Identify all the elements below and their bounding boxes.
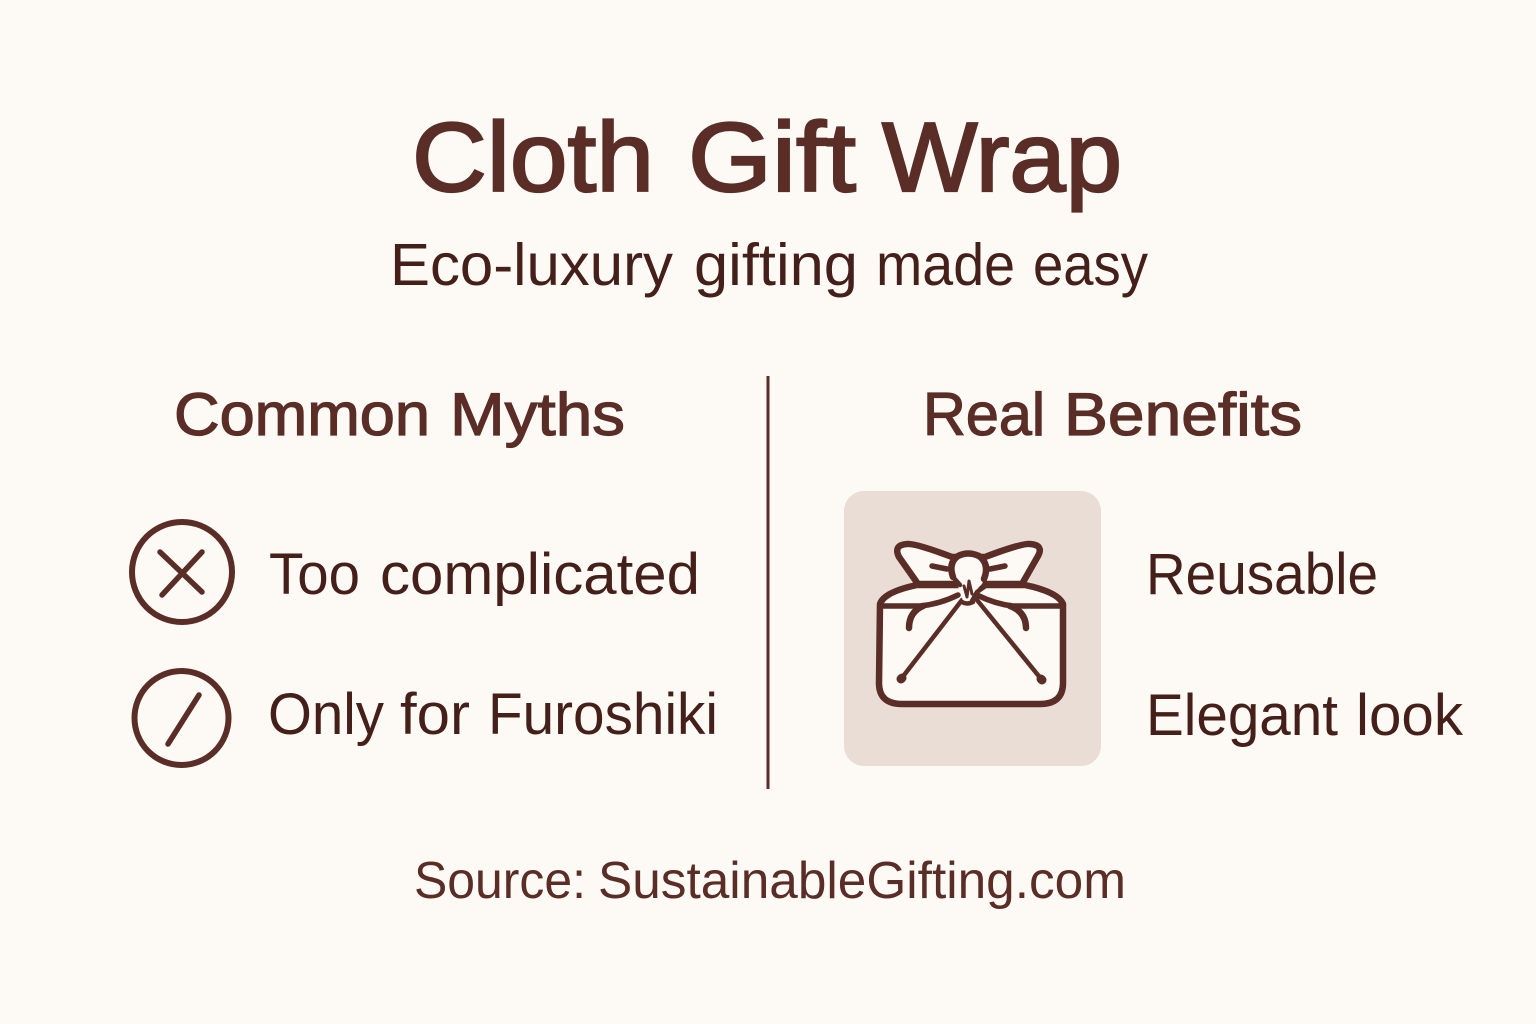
title <box>412 102 1122 212</box>
myth: only for furoshiki: for <box>400 682 470 747</box>
icon: circled slash <box>134 671 228 765</box>
heading: real benefits: Real <box>923 381 1045 448</box>
myth: only for furoshiki: Only <box>268 682 384 747</box>
bow loops <box>897 544 1040 584</box>
source line: SustainableGifting.com <box>598 852 1126 910</box>
string end dots <box>901 678 1042 680</box>
benefit: elegant look: look <box>1356 683 1464 748</box>
heading: real benefits: Benefits <box>1064 381 1302 448</box>
long strings <box>901 600 1042 680</box>
myth: only for furoshiki: Furoshiki <box>488 682 718 747</box>
heading: common myths: Myths <box>450 381 625 448</box>
subtitle <box>390 232 1148 298</box>
knot <box>952 554 986 601</box>
myth: only for furoshiki <box>268 682 718 747</box>
lid fold line <box>881 595 1062 606</box>
subtitle: Eco-luxury <box>390 232 673 298</box>
myth: too complicated: complicated <box>380 542 700 607</box>
heading: real benefits <box>923 381 1302 448</box>
panel: gift icon tile <box>844 491 1101 766</box>
fold tails <box>909 606 1026 628</box>
myth: too complicated: Too <box>269 542 360 607</box>
subtitle: gifting <box>694 232 858 298</box>
center divider <box>766 376 770 789</box>
benefit: elegant look: Elegant <box>1146 683 1338 748</box>
heading: common myths <box>174 381 625 448</box>
benefit: reusable: Reusable <box>1146 542 1378 607</box>
icon: furoshiki wrapped gift <box>879 544 1063 704</box>
title: Gift <box>688 102 856 212</box>
subtitle: easy <box>1033 232 1148 298</box>
source line: Source: <box>414 852 586 910</box>
benefit: elegant look <box>1146 683 1464 748</box>
title: Cloth <box>412 102 654 212</box>
wrapped box body <box>879 585 1063 704</box>
icon: circled x <box>132 522 232 622</box>
subtitle: made <box>876 232 1015 298</box>
bow inner lines <box>932 566 1005 569</box>
title: Wrap <box>882 102 1122 212</box>
heading: common myths: Common <box>174 381 430 448</box>
